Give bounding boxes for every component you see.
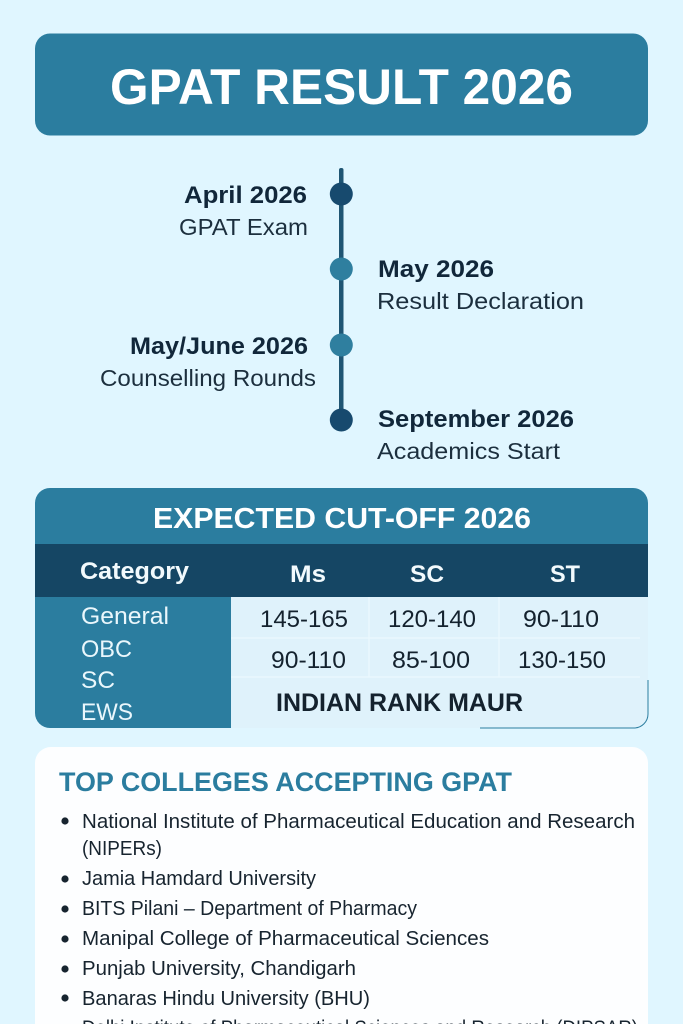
colleges list: Manipal College of Pharmaceutical Sciences xyxy=(82,927,489,950)
category column: General xyxy=(81,603,169,630)
milestone: April 2026 xyxy=(179,182,353,240)
milestone: May/June 2026: Counselling Rounds xyxy=(100,365,316,391)
table header row: SC xyxy=(410,561,444,588)
table values: 90-110 xyxy=(271,647,346,674)
table values: 145-165 xyxy=(260,606,348,633)
colleges list: Jamia Hamdard University xyxy=(82,867,317,890)
table body background xyxy=(231,597,648,728)
panel: top colleges xyxy=(35,747,648,1024)
table header row xyxy=(35,544,648,597)
colleges list xyxy=(61,810,638,1024)
colleges list: (NIPERs) xyxy=(82,837,162,860)
milestone: May 2026: Result Declaration xyxy=(377,288,584,314)
panel: expected cut-off table xyxy=(35,488,648,728)
title banner xyxy=(35,34,648,136)
table heading: EXPECTED CUT-OFF 2026 xyxy=(153,503,531,535)
milestone: September 2026: September 2026 xyxy=(378,406,574,433)
table values: 90-110 xyxy=(523,606,599,633)
category column: SC xyxy=(81,667,115,694)
milestone: April 2026: GPAT Exam xyxy=(179,214,308,240)
category column xyxy=(81,603,169,726)
timeline spine xyxy=(339,168,344,420)
colleges heading: TOP COLLEGES ACCEPTING GPAT xyxy=(59,767,513,797)
table values: 120-140 xyxy=(388,606,476,633)
milestone: September 2026 xyxy=(330,406,574,464)
table values xyxy=(260,606,606,674)
colleges list: National Institute of Pharmaceutical Education and Research xyxy=(82,810,635,833)
category column: OBC xyxy=(81,636,132,663)
table header row: ST xyxy=(550,561,580,588)
milestone: May/June 2026: May/June 2026 xyxy=(130,333,308,360)
table values: 85-100 xyxy=(392,647,470,674)
table values: 130-150 xyxy=(518,647,606,674)
milestone: April 2026: April 2026 xyxy=(184,182,307,209)
timeline xyxy=(100,168,584,464)
milestone: September 2026: Academics Start xyxy=(377,438,561,464)
milestone: May/June 2026 xyxy=(100,333,353,391)
table footer label: INDIAN RANK MAUR xyxy=(276,689,523,717)
colleges list: BITS Pilani – Department of Pharmacy xyxy=(82,897,418,920)
milestone: May 2026 xyxy=(330,256,584,314)
title: GPAT RESULT 2026 xyxy=(110,59,573,115)
colleges list: Punjab University, Chandigarh xyxy=(82,957,356,980)
table header row: Ms xyxy=(290,561,326,588)
colleges list: Banaras Hindu University (BHU) xyxy=(82,987,370,1010)
table header row: Category xyxy=(80,558,190,585)
category column: EWS xyxy=(81,699,133,726)
milestone: May 2026: May 2026 xyxy=(378,256,494,283)
